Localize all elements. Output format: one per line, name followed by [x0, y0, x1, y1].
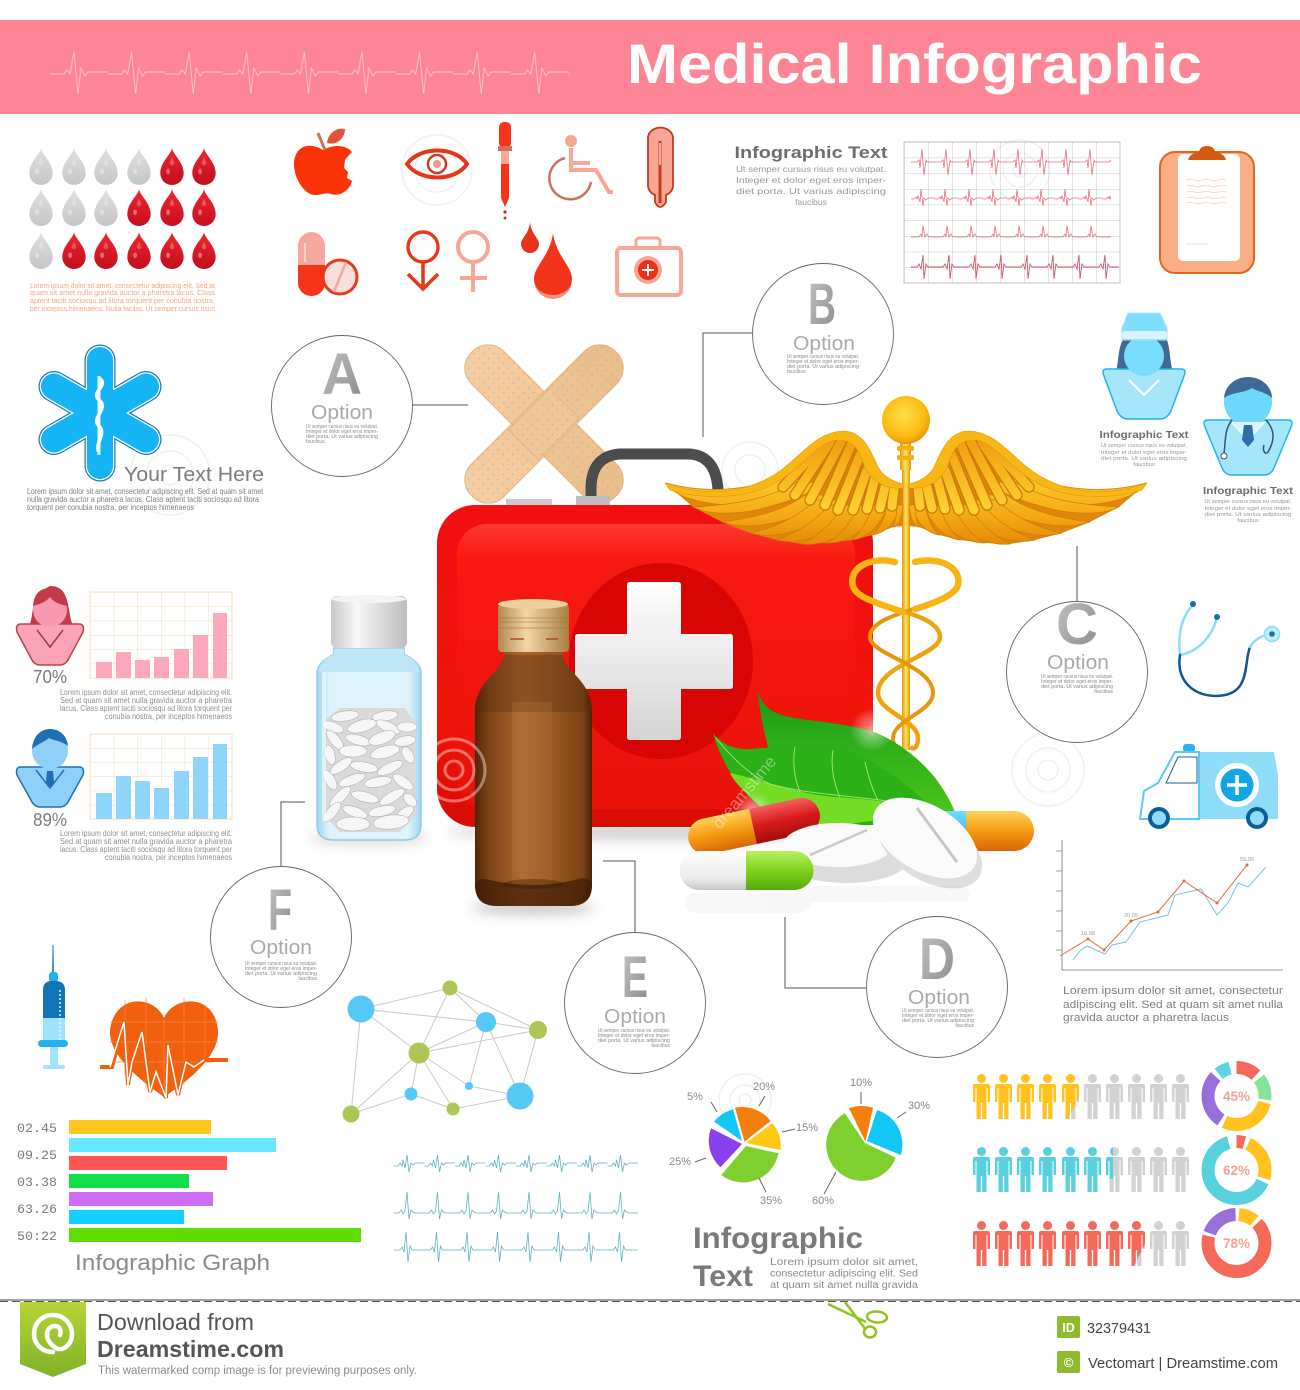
option circle D: faucibus	[955, 1023, 974, 1029]
donut 45 percent	[1208, 1068, 1265, 1124]
text block: bottom caption	[770, 1257, 918, 1291]
icon: capsule and tablet	[298, 232, 357, 296]
capsule: orange and red	[685, 795, 823, 858]
icon: doctor	[1204, 377, 1292, 475]
text block: blue chart caption: Lorem ipsum dolor sit amet, consectetur adipiscing elit.	[60, 829, 232, 838]
line chart: 16.98	[1081, 931, 1095, 937]
pie 1 labels	[669, 1081, 818, 1207]
icon: apple	[294, 129, 352, 195]
text: nurse caption: Ut semper cursus risus eu volutpat.	[1101, 443, 1187, 449]
option circle C: Ut semper cursus risus eu volutpat.	[1041, 674, 1113, 680]
option circle A: faucibus	[306, 439, 325, 445]
text block: line chart caption: adipiscing elit. Sed at quam sit amet nulla	[1063, 999, 1284, 1011]
option circle A	[272, 336, 412, 476]
pie 1 labels: 25%	[669, 1156, 691, 1168]
donut 78 percent	[1208, 1214, 1265, 1272]
capsule: white and green	[680, 851, 814, 890]
footer credit row: ©	[1064, 1355, 1074, 1370]
pie 2 labels: 60%	[812, 1195, 834, 1207]
bottle cap	[498, 599, 569, 652]
text: nurse caption: Infographic Text	[1100, 429, 1189, 441]
icon: male symbol	[408, 232, 438, 289]
pie 1 labels: 15%	[796, 1122, 818, 1134]
icon: man avatar	[16, 729, 84, 807]
watermark on kit	[423, 739, 485, 801]
text: nurse caption	[1100, 429, 1189, 468]
header ECG line	[50, 42, 570, 102]
option circle C	[1006, 592, 1148, 742]
pie 2 labels: 10%	[850, 1077, 872, 1089]
people row: cyan	[973, 1147, 1189, 1192]
icon: first aid kit	[617, 238, 681, 295]
kit cross circle	[569, 563, 753, 759]
kit white cross	[575, 582, 733, 740]
capsule: blue and orange	[930, 811, 1034, 851]
text block: blue chart caption: Sed at quam sit amet nulla gravida auctor a pharetra	[60, 837, 233, 846]
ECG traces blue	[394, 1150, 638, 1264]
option circle F: Option	[250, 937, 312, 959]
bar labels	[17, 1121, 57, 1244]
icon: stethoscope	[1179, 601, 1280, 696]
option circle D: D	[919, 927, 955, 992]
donut 78 percent: 78%	[1223, 1236, 1250, 1251]
option circle A: diet porta. Ut varius adipiscing	[306, 434, 378, 440]
icon: dropper	[498, 122, 512, 219]
icon: thermometer	[648, 128, 673, 207]
option circle E: diet porta. Ut varius adipiscing	[598, 1038, 670, 1044]
icon: star of life	[54, 360, 146, 466]
ECG chart grid	[904, 142, 1120, 283]
horizontal bar chart	[17, 1120, 361, 1244]
line chart: 20.05	[1124, 913, 1138, 919]
text: 89 percent: 89%	[33, 810, 67, 830]
text block: star caption	[27, 487, 264, 512]
caduceus	[665, 396, 1147, 750]
heading: infographic text bottom: Infographic	[693, 1222, 863, 1255]
option circle F: diet porta. Ut varius adipiscing	[245, 971, 317, 977]
icon: female symbol	[458, 232, 488, 292]
drops caption: per inceptos himenaeos. Nulla facilisi. Ut semper cursus risus	[30, 304, 215, 313]
text block: bottom caption: consectetur adipiscing elit. Sed	[770, 1268, 918, 1280]
icon: blood drops	[521, 222, 572, 299]
bandage cross	[456, 336, 632, 512]
bar labels: 50:22	[17, 1229, 57, 1244]
option circle B: Option	[793, 333, 855, 355]
option circle B: Ut semper cursus risus eu volutpat.	[787, 354, 859, 360]
pill reflections	[685, 886, 970, 913]
title: Medical Infographic	[627, 32, 1202, 95]
icon: wheelchair	[549, 135, 613, 199]
icon: nurse	[1103, 313, 1185, 419]
option circle C: diet porta. Ut varius adipiscing	[1041, 684, 1113, 690]
option circle B: faucibus	[787, 369, 806, 375]
pie 1 labels: 5%	[687, 1091, 703, 1103]
text: doctor caption: faucibus	[1237, 518, 1259, 524]
text block: infographic text top: faucibus	[795, 197, 827, 207]
text block: infographic text top: Ut semper cursus risus eu volutpat.	[736, 164, 886, 174]
text: doctor caption: Integer et dolor eget eros imper-	[1204, 506, 1292, 512]
text block: pink chart caption: Sed at quam sit amet nulla gravida auctor a pharetra	[60, 696, 233, 705]
text block: infographic text top	[734, 143, 888, 207]
bar labels: 02.45	[17, 1121, 57, 1136]
option circle D: Option	[908, 987, 970, 1009]
option circle B: diet porta. Ut varius adipiscing	[787, 364, 859, 370]
icon: clipboard	[1160, 146, 1254, 273]
line chart	[1056, 840, 1283, 970]
option circle D: Integer et dolor eget eros imper-	[902, 1013, 974, 1019]
blood drops grid	[29, 148, 216, 269]
option circle A: A	[322, 342, 362, 407]
heading: infographic text bottom: Text	[693, 1260, 753, 1293]
option circle C: C	[1056, 592, 1098, 657]
option circle F: Ut semper cursus risus eu volutpat.	[245, 961, 317, 967]
pills in jar	[320, 709, 419, 831]
text: nurse caption: diet porta. Ut varius adipiscing	[1101, 456, 1187, 462]
bar labels: 03.38	[17, 1175, 57, 1190]
pie 2 labels: 30%	[908, 1100, 930, 1112]
option circle A: Ut semper cursus risus eu volutpat.	[306, 424, 378, 430]
footer text	[97, 1309, 417, 1377]
text block: bottom caption: Lorem ipsum dolor sit amet,	[770, 1257, 918, 1268]
footer text: Dreamstime.com	[97, 1336, 284, 1362]
text: nurse caption: Integer et dolor eget eros imper-	[1101, 450, 1187, 456]
text block: line chart caption: Lorem ipsum dolor sit amet, consectetur	[1063, 985, 1283, 997]
people row: yellow	[973, 1074, 1189, 1119]
front leaf	[713, 733, 935, 826]
option circle E: faucibus	[651, 1043, 670, 1049]
footer text: This watermarked comp image is for previewing purposes only.	[98, 1365, 417, 1377]
option circle F: F	[268, 878, 292, 943]
text block: star caption: Lorem ipsum dolor sit amet, consectetur adipiscing elit. Sed at quam sit amet	[27, 487, 264, 496]
text: doctor caption: diet porta. Ut varius adipiscing	[1204, 512, 1292, 518]
footer text: Download from	[97, 1309, 254, 1335]
text: your text here: Your Text Here	[124, 463, 264, 486]
people row: red	[973, 1221, 1189, 1266]
donut 62 percent	[1208, 1142, 1265, 1198]
drops caption: aptent taciti sociosqu ad litora torquent per conubia nostra,	[30, 296, 215, 305]
option circle D: Ut semper cursus risus eu volutpat.	[902, 1008, 974, 1014]
option circle E: Ut semper cursus risus eu volutpat.	[598, 1028, 670, 1034]
donut 45 percent: 45%	[1223, 1089, 1250, 1104]
icon: syringe	[38, 945, 68, 1069]
pie 1 labels: 35%	[760, 1195, 782, 1207]
drops caption: Lorem ipsum dolor sit amet, consectetur adipiscing elit. Sed at	[30, 281, 216, 290]
text: 70 percent: 70%	[33, 667, 67, 687]
watermark text: dreamstime	[709, 752, 780, 833]
text: infographic graph: Infographic Graph	[75, 1250, 270, 1275]
text block: blue chart caption: lacus. Class aptent taciti sociosqu ad litora torquent per	[60, 845, 232, 854]
icon: ambulance	[1140, 744, 1278, 827]
connector lines	[281, 333, 1077, 988]
option circle F: Integer et dolor eget eros imper-	[245, 966, 317, 972]
option circle C: Option	[1047, 652, 1109, 674]
text block: infographic text top: Integer et dolor eget eros imper-	[736, 175, 886, 185]
text: doctor caption: Infographic Text	[1203, 485, 1294, 497]
back leaf	[757, 690, 955, 820]
footer credit row	[1057, 1351, 1278, 1373]
bar labels: 09.25	[17, 1148, 57, 1163]
caduceus wings	[665, 431, 1147, 544]
text block: pink chart caption: lacus. Class aptent taciti sociosqu ad litora torquent per	[60, 704, 232, 713]
heading: infographic text bottom	[693, 1222, 863, 1293]
text block: infographic text top: diet porta. Ut varius adipiscing	[736, 186, 886, 196]
footer ID row: 32379431	[1087, 1321, 1151, 1337]
text block: star caption: torquent per conubia nostra, per inceptos himenaeos	[27, 503, 194, 512]
first aid kit handle	[506, 454, 718, 505]
watermark spirals	[130, 135, 1084, 1126]
option circle C: faucibus	[1094, 689, 1113, 695]
pie chart 1	[669, 1081, 818, 1207]
text: doctor caption: Ut semper cursus risus eu volutpat.	[1204, 499, 1292, 505]
tablet: upper	[859, 781, 996, 905]
network diagram	[342, 980, 547, 1122]
footer ID row: ID	[1062, 1321, 1075, 1335]
option circle C: Integer et dolor eget eros imper-	[1041, 679, 1113, 685]
option circle E: E	[622, 945, 648, 1010]
option circle B	[752, 264, 894, 404]
text block: star caption: nulla gravida auctor a pharetra lacus. Class aptent taciti sociosqu ad litora	[27, 495, 259, 504]
bar labels: 63.26	[17, 1202, 57, 1217]
drops caption	[30, 281, 216, 313]
first aid kit case	[437, 505, 873, 827]
text block: line chart caption: gravida auctor a pharetra lacus	[1063, 1012, 1230, 1024]
text: nurse caption: faucibus	[1133, 462, 1155, 468]
caduceus snakes	[852, 560, 958, 748]
bar chart: blue	[90, 734, 232, 819]
text: doctor caption	[1203, 485, 1294, 524]
pie 2 labels	[812, 1077, 930, 1207]
icon: woman avatar	[16, 586, 84, 665]
text block: bottom caption: at quam sit amet nulla gravida	[770, 1280, 918, 1291]
option circle D	[866, 916, 1008, 1058]
option circle E: Option	[604, 1006, 666, 1028]
option circle B: Integer et dolor eget eros imper-	[787, 359, 859, 365]
pie 1 labels: 20%	[753, 1081, 775, 1093]
text block: pink chart caption: conubia nostra, per inceptos himenaeos	[105, 712, 232, 721]
caduceus ball	[882, 396, 930, 470]
header banner	[0, 20, 1300, 114]
option circle E: Integer et dolor eget eros imper-	[598, 1033, 670, 1039]
donut 62 percent: 62%	[1223, 1163, 1250, 1178]
brown syrup bottle	[471, 599, 595, 915]
option circle F	[210, 866, 352, 1008]
option circle E	[564, 932, 706, 1074]
option circle A: Integer et dolor eget eros imper-	[306, 429, 378, 435]
line chart: 55.00	[1240, 857, 1254, 863]
option circle B: B	[808, 272, 836, 337]
pill jar	[309, 595, 429, 845]
text block: infographic text top: Infographic Text	[734, 143, 888, 162]
icon: eye	[407, 150, 467, 178]
text block: blue chart caption: conubia nostra, per inceptos himenaeos	[105, 853, 232, 862]
pie chart 2	[812, 1077, 930, 1207]
icon: heart with ECG	[100, 998, 228, 1098]
bar chart: pink	[90, 592, 232, 678]
text block: pink chart caption	[60, 688, 233, 721]
tablet: lower	[783, 823, 908, 883]
option circle D: diet porta. Ut varius adipiscing	[902, 1018, 974, 1024]
footer badge	[20, 1302, 86, 1377]
kit shadow	[445, 824, 875, 840]
icon: scissors	[828, 1302, 887, 1338]
drops caption: quam sit amet nulla gravida auctor a pharetra lacus. Class	[30, 288, 215, 297]
text block: line chart caption	[1063, 985, 1284, 1024]
footer cut line	[0, 1300, 1300, 1302]
caduceus pole	[902, 455, 910, 750]
text block: blue chart caption	[60, 829, 233, 862]
footer ID row	[1057, 1316, 1151, 1338]
option circle F: faucibus	[298, 976, 317, 982]
herbal leaves	[713, 690, 955, 832]
option circle A: Option	[311, 402, 373, 424]
footer credit row: Vectomart | Dreamstime.com	[1088, 1355, 1278, 1372]
text block: pink chart caption: Lorem ipsum dolor sit amet, consectetur adipiscing elit.	[60, 688, 232, 697]
